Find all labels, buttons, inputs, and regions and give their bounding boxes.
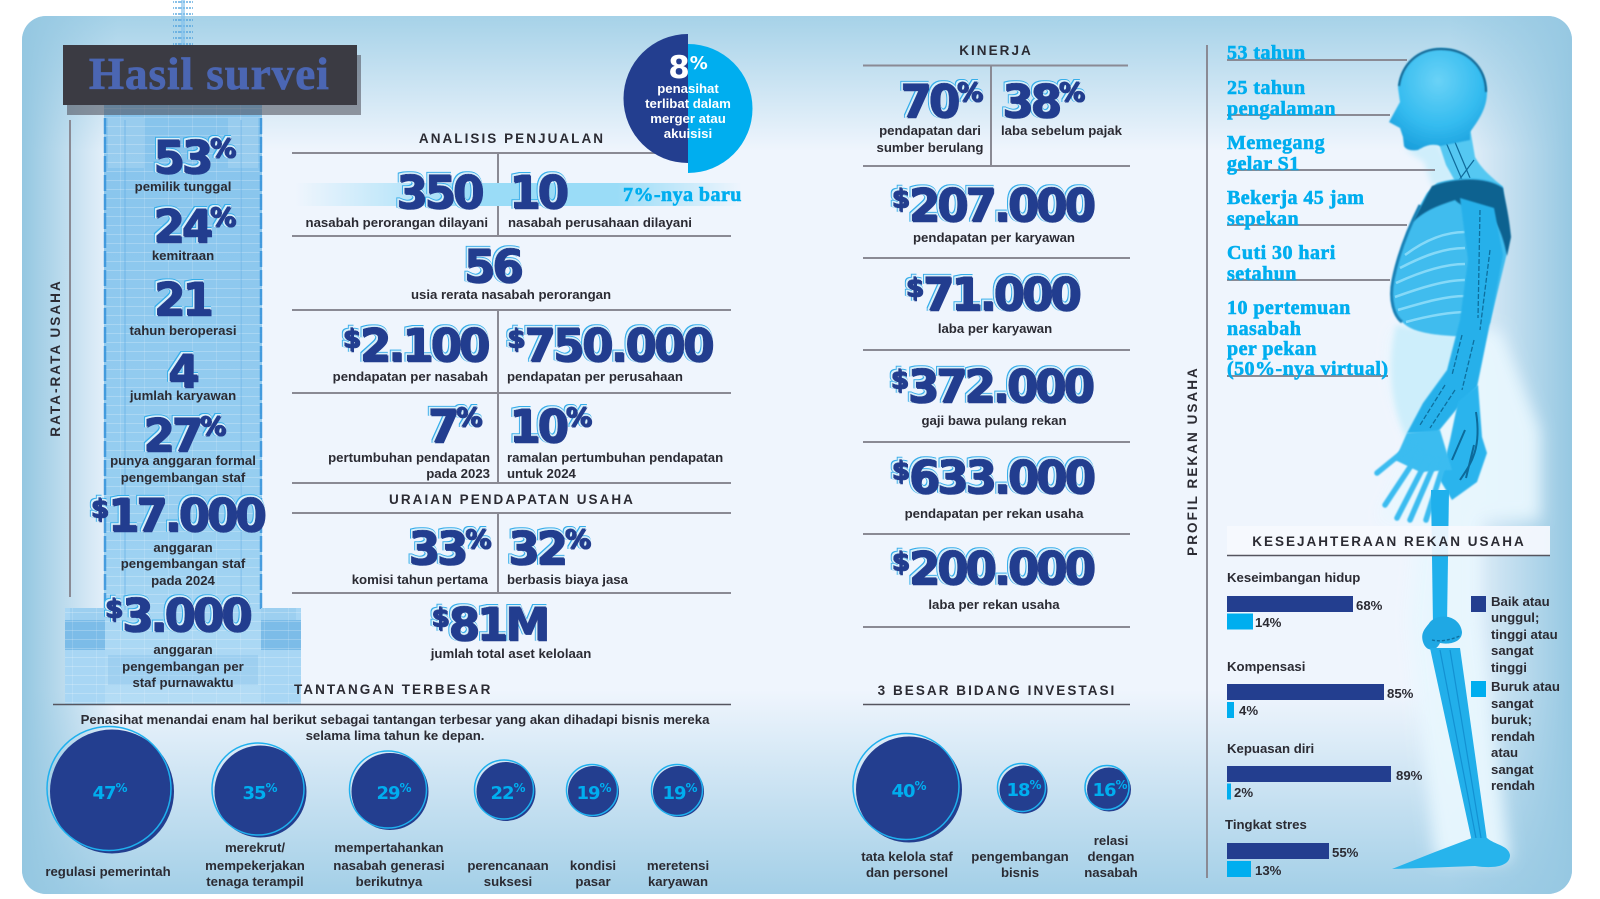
stat: 350 nasabah: nasabah perorangan dilayani xyxy=(306,215,488,230)
bubble: tata kelola staf: tata kelola staf xyxy=(861,849,953,864)
bubble: kondisi pasar xyxy=(566,764,619,889)
stat: $17.000 xyxy=(91,489,265,588)
stat: $17.000: anggaran xyxy=(153,540,213,555)
legend: baik: tinggi xyxy=(1491,660,1527,675)
bars: keseimbangan hidup: 14% xyxy=(1255,615,1282,630)
profile: pertemuan: (50%-nya virtual) xyxy=(1227,358,1389,380)
section label: RATA-RATA USAHA xyxy=(48,279,63,437)
shin bones xyxy=(1430,648,1487,842)
stat: 7%: 7 xyxy=(428,400,456,453)
stat: $2.100 xyxy=(333,319,489,384)
bars: tingkat stres: Tingkat stres xyxy=(1225,817,1307,832)
stat: $372.000: 372.000 xyxy=(908,360,1093,413)
building illustration xyxy=(65,0,301,704)
panel: analisis penjualan xyxy=(292,131,742,483)
pelvis xyxy=(1440,385,1487,500)
panel: kinerja xyxy=(863,43,1130,627)
pale body glow xyxy=(1380,330,1540,860)
legend: baik: tinggi atau xyxy=(1491,627,1558,642)
stat: $3.000: staf purnawaktu xyxy=(132,675,234,690)
stat: $3.000: $ xyxy=(105,594,122,624)
stat: 70%: % xyxy=(957,78,983,108)
stat: $17.000: pada 2024 xyxy=(151,573,216,588)
bubble: mempertahankan nasabah: nasabah generasi xyxy=(333,858,445,873)
stat: 38%: % xyxy=(1059,78,1085,108)
bubble: meretensi karyawan: % xyxy=(686,781,698,795)
stat: $200.000: 200.000 xyxy=(909,542,1094,595)
bubble: meretensi karyawan: karyawan xyxy=(648,874,708,889)
bubble: perencanaan suksesi: suksesi xyxy=(484,874,532,889)
stat: $3.000 xyxy=(105,589,251,690)
stat: 4 xyxy=(129,345,236,403)
bubble: relasi dengan nasabah: 16 xyxy=(1092,780,1116,801)
legend: baik: Baik atau xyxy=(1491,594,1550,609)
stat: 21: 21 xyxy=(154,273,211,326)
bubble: kondisi pasar: pasar xyxy=(575,874,611,889)
title xyxy=(63,45,361,115)
stat: 53% xyxy=(135,131,236,194)
profile: pertemuan: per pekan xyxy=(1227,338,1317,360)
bars: kepuasan diri xyxy=(1227,741,1423,800)
stat: 70%: sumber berulang xyxy=(876,140,984,155)
stat: 10% xyxy=(507,400,723,481)
stat: 70%: 70 xyxy=(900,75,957,128)
stat: 70% xyxy=(876,75,984,155)
stat: 4: jumlah karyawan xyxy=(129,388,236,403)
stat: $81M xyxy=(430,598,591,661)
profile: pengalaman xyxy=(1227,77,1336,120)
callout: 8% merger: merger atau xyxy=(650,111,726,126)
bubble: kondisi pasar: kondisi xyxy=(570,858,616,873)
stat: $3.000: anggaran xyxy=(153,642,213,657)
shoulder shadow xyxy=(1413,180,1511,256)
stat: $207.000: 207.000 xyxy=(909,179,1094,232)
callout: 8% merger: % xyxy=(690,53,708,74)
stat: $633.000 xyxy=(891,451,1094,521)
stat: 10 nasabah: 10 xyxy=(509,166,567,219)
bars: kepuasan diri: 89% xyxy=(1396,768,1423,783)
bubble: kondisi pasar: % xyxy=(600,781,612,795)
legend: baik: unggul; xyxy=(1491,610,1539,625)
stat: 56 xyxy=(411,240,611,302)
stat: $17.000: pengembangan staf xyxy=(121,556,246,571)
bars: keseimbangan hidup: 68% xyxy=(1356,598,1383,613)
stat: 350 nasabah xyxy=(306,166,488,230)
torso and ribs xyxy=(1392,178,1510,337)
stat: 24% xyxy=(152,200,236,263)
stat: 70%: pendapatan dari xyxy=(879,123,981,138)
bubble: tata kelola staf: % xyxy=(915,779,927,793)
bubble: merekrut: % xyxy=(266,781,278,795)
stat: $750.000: $ xyxy=(507,324,524,354)
panel: tantangan terbesar xyxy=(45,682,731,889)
highlight band xyxy=(295,183,742,206)
stat: 27%: 27 xyxy=(143,409,200,462)
stat: $633.000: $ xyxy=(891,456,909,486)
heading: URAIAN PENDAPATAN USAHA xyxy=(389,492,635,507)
intro text xyxy=(81,712,710,743)
stat: $3.000: 3.000 xyxy=(122,589,251,642)
stat: $2.100: 2.100 xyxy=(360,319,489,372)
stat: $200.000: laba per rekan usaha xyxy=(928,597,1060,612)
profile: usia: 53 tahun xyxy=(1227,42,1306,64)
bubble: regulasi pemerintah xyxy=(45,726,174,879)
profile: jam kerja xyxy=(1227,187,1364,230)
panel: profil rekan usaha xyxy=(1185,42,1435,878)
stat: $372.000: $ xyxy=(890,365,908,395)
panel: uraian pendapatan usaha xyxy=(292,492,731,661)
heading xyxy=(1227,526,1550,556)
neck xyxy=(1437,128,1503,190)
bubble: regulasi pemerintah: % xyxy=(116,781,128,795)
bars: kompensasi: Kompensasi xyxy=(1227,659,1305,674)
stat: $750.000: 750.000 xyxy=(524,319,713,372)
callout: 8% merger xyxy=(624,34,752,173)
bars: kepuasan diri: Kepuasan diri xyxy=(1227,741,1314,756)
stat: 10%: ramalan pertumbuhan pendapatan xyxy=(507,450,723,465)
bubble: pengembangan bisnis: 18 xyxy=(1006,780,1030,801)
legend: buruk xyxy=(1471,679,1560,793)
stat: 53%: % xyxy=(210,134,236,164)
stat: 350 nasabah: 350 xyxy=(396,166,483,219)
profile: cuti xyxy=(1227,242,1336,285)
bars: kompensasi: 85% xyxy=(1387,686,1414,701)
profile: jam kerja: sepekan xyxy=(1227,208,1299,230)
knee xyxy=(1422,617,1462,650)
stat: 53%: 53 xyxy=(153,131,210,184)
legend: buruk: sangat xyxy=(1491,696,1534,711)
intro text: Penasihat menandai enam hal berikut sebagai tantangan terbesar yang akan dihadapi bisnis mereka xyxy=(81,712,710,727)
heading: 3 BESAR BIDANG INVESTASI xyxy=(878,683,1116,698)
callout: 8% merger: terlibat dalam xyxy=(645,96,731,111)
section label: PROFIL REKAN USAHA xyxy=(1185,366,1200,556)
bubble: pengembangan bisnis: pengembangan xyxy=(971,849,1069,864)
bubble: merekrut xyxy=(205,743,306,889)
bars: tingkat stres: 13% xyxy=(1255,863,1282,878)
panel: rata-rata usaha xyxy=(48,120,265,690)
stat: 10 nasabah xyxy=(508,166,692,230)
stat: 10%: 10 xyxy=(509,400,566,453)
bubble: meretensi karyawan: meretensi xyxy=(647,858,709,873)
legend: buruk: Buruk atau xyxy=(1491,679,1560,694)
stat: $71.000: 71.000 xyxy=(923,268,1080,321)
profile: pertemuan: nasabah xyxy=(1227,318,1301,340)
stat: 38%: laba sebelum pajak xyxy=(1001,123,1123,138)
bubble: perencanaan suksesi: perencanaan xyxy=(467,858,549,873)
bubble: mempertahankan nasabah: mempertahankan xyxy=(334,840,444,855)
stat: $81M: $ xyxy=(431,603,448,633)
stat: 4: 4 xyxy=(168,345,198,398)
stat: 10 nasabah: nasabah perusahaan dilayani xyxy=(508,215,692,230)
stat: $633.000: 633.000 xyxy=(909,451,1094,504)
bubble: mempertahankan nasabah: % xyxy=(400,781,412,795)
profile: pertemuan xyxy=(1227,297,1389,380)
stat: 27%: punya anggaran formal xyxy=(110,453,256,468)
bubble: merekrut: merekrut/ xyxy=(225,840,285,855)
stat: $2.100: pendapatan per nasabah xyxy=(333,369,488,384)
bubble: relasi dengan nasabah xyxy=(1084,766,1138,880)
stat: $750.000: pendapatan per perusahaan xyxy=(507,369,683,384)
bubble: tata kelola staf xyxy=(853,734,962,880)
legend: buruk: sangat xyxy=(1491,762,1534,777)
stat: 38%: 38 xyxy=(1002,75,1059,128)
stat: $372.000: gaji bawa pulang rekan xyxy=(921,413,1067,428)
bars: tingkat stres: 55% xyxy=(1332,845,1359,860)
bubble: regulasi pemerintah: 47 xyxy=(92,783,116,804)
bars: keseimbangan hidup: Keseimbangan hidup xyxy=(1227,570,1360,585)
callout: 8% merger: penasihat xyxy=(657,81,719,96)
stat: 24%: kemitraan xyxy=(152,248,214,263)
stat: $3.000: pengembangan per xyxy=(122,659,244,674)
stat: $633.000: pendapatan per rekan usaha xyxy=(905,506,1084,521)
stat: $207.000: pendapatan per karyawan xyxy=(913,230,1075,245)
legend: baik: sangat xyxy=(1491,643,1534,658)
profile: pengalaman: pengalaman xyxy=(1227,98,1336,120)
stat: 7%: % xyxy=(456,403,482,433)
bubble: relasi dengan nasabah: nasabah xyxy=(1084,865,1138,880)
heading: ANALISIS PENJUALAN xyxy=(419,131,605,146)
profile: gelar xyxy=(1227,132,1325,175)
stat: 56: usia rerata nasabah perorangan xyxy=(411,287,611,302)
stat: 7%: pertumbuhan pendapatan xyxy=(328,450,490,465)
bars: keseimbangan hidup xyxy=(1227,570,1383,630)
stat: 32% xyxy=(507,522,629,587)
bars: kompensasi: 4% xyxy=(1239,703,1258,718)
stat: 33%: 33 xyxy=(408,522,465,575)
callout: 8% merger: akuisisi xyxy=(664,126,712,141)
bubble: meretensi karyawan: 19 xyxy=(662,783,686,804)
bubble: relasi dengan nasabah: % xyxy=(1116,778,1128,792)
stat: 33%: komisi tahun pertama xyxy=(352,572,489,587)
bubble: perencanaan suksesi: 22 xyxy=(490,783,514,804)
skeleton illustration xyxy=(1377,48,1540,869)
stat: $200.000 xyxy=(891,542,1094,612)
stat: $71.000: laba per karyawan xyxy=(938,321,1052,336)
legend: buruk: rendah xyxy=(1491,778,1535,793)
stat: 32%: berbasis biaya jasa xyxy=(507,572,629,587)
stat: $71.000: $ xyxy=(906,273,923,303)
bubble: merekrut: mempekerjakan xyxy=(205,858,305,873)
stat: 24%: 24 xyxy=(153,200,210,253)
legend: buruk: buruk; xyxy=(1491,712,1532,727)
profile: gelar: gelar S1 xyxy=(1227,153,1300,175)
bubble: mempertahankan nasabah: 29 xyxy=(376,783,400,804)
bubble: tata kelola staf: 40 xyxy=(891,781,915,802)
throat glow xyxy=(1405,142,1458,186)
heading: KINERJA xyxy=(959,43,1033,58)
thigh bone xyxy=(1431,490,1449,625)
stat: 33%: % xyxy=(465,525,491,555)
profile: pengalaman: 25 tahun xyxy=(1227,77,1306,99)
callout: 8% merger: 8 xyxy=(668,50,690,86)
hand xyxy=(1377,430,1452,520)
arm xyxy=(1407,198,1503,433)
stat: $2.100: $ xyxy=(343,324,360,354)
profile: cuti: Cuti 30 hari xyxy=(1227,242,1336,264)
bubble: pengembangan bisnis xyxy=(971,764,1069,880)
stat: 27%: % xyxy=(200,412,226,442)
stat: $81M: 81M xyxy=(448,598,547,651)
stat: 38% xyxy=(1001,75,1123,138)
profile: cuti: setahun xyxy=(1227,263,1297,285)
legend: buruk: rendah xyxy=(1491,729,1535,744)
bubble: merekrut: tenaga terampil xyxy=(206,874,304,889)
stat: $81M: jumlah total aset kelolaan xyxy=(430,646,591,661)
title: Hasil survei xyxy=(89,49,330,99)
stat: $17.000: 17.000 xyxy=(108,489,265,542)
stat: 7%: pada 2023 xyxy=(426,466,490,481)
stat: 53%: pemilik tunggal xyxy=(135,179,231,194)
stat: 56: 56 xyxy=(464,240,521,293)
foot xyxy=(1392,838,1510,869)
bubble: perencanaan suksesi: % xyxy=(514,781,526,795)
bubble: merekrut: 35 xyxy=(242,783,266,804)
stat: $17.000: $ xyxy=(91,494,108,524)
panel: 3 besar bidang investasi xyxy=(853,683,1138,880)
bubble: relasi dengan nasabah: relasi xyxy=(1094,833,1128,848)
bars: tingkat stres xyxy=(1225,817,1359,878)
bubble: regulasi pemerintah: regulasi pemerintah xyxy=(45,864,171,879)
stat: $71.000 xyxy=(906,268,1080,336)
stat: 10%: untuk 2024 xyxy=(507,466,577,481)
profile: gelar: Memegang xyxy=(1227,132,1325,154)
heading: TANTANGAN TERBESAR xyxy=(294,682,492,697)
bubble: tata kelola staf: dan personel xyxy=(866,865,948,880)
bars: kepuasan diri: 2% xyxy=(1234,785,1253,800)
stat: 21 xyxy=(130,273,236,338)
bars: kompensasi xyxy=(1227,659,1414,718)
stat: 27% xyxy=(110,409,256,485)
legend: baik xyxy=(1471,594,1558,675)
bubble: kondisi pasar: 19 xyxy=(576,783,600,804)
stat: 21: tahun beroperasi xyxy=(130,323,236,338)
panel: kesejahteraan rekan usaha xyxy=(1225,526,1560,878)
profile: jam kerja: Bekerja 45 jam xyxy=(1227,187,1364,209)
stat: 24%: % xyxy=(210,203,236,233)
stat: 7% xyxy=(328,400,490,481)
bubble: mempertahankan nasabah xyxy=(333,751,445,889)
bubble: perencanaan suksesi xyxy=(467,760,549,889)
note: 7% baru: 7%-nya baru xyxy=(623,184,742,206)
bubble: pengembangan bisnis: bisnis xyxy=(1001,865,1039,880)
stat: 27%: pengembangan staf xyxy=(121,470,246,485)
intro text: selama lima tahun ke depan. xyxy=(306,728,484,743)
stat: $200.000: $ xyxy=(891,547,909,577)
bubble: relasi dengan nasabah: dengan xyxy=(1088,849,1134,864)
profile: pertemuan: 10 pertemuan xyxy=(1227,297,1351,319)
bubble: meretensi karyawan xyxy=(647,764,709,889)
stat: 10%: % xyxy=(566,403,592,433)
stat: 33% xyxy=(352,522,491,587)
stat: 32%: 32 xyxy=(508,522,565,575)
head xyxy=(1389,48,1487,150)
stat: $207.000: $ xyxy=(891,184,909,214)
legend: buruk: atau xyxy=(1491,745,1518,760)
stat: 32%: % xyxy=(565,525,591,555)
heading: KESEJAHTERAAN REKAN USAHA xyxy=(1252,534,1526,549)
bubble: pengembangan bisnis: % xyxy=(1030,778,1042,792)
abdomen glow xyxy=(1391,325,1470,442)
bubble: mempertahankan nasabah: berikutnya xyxy=(356,874,423,889)
